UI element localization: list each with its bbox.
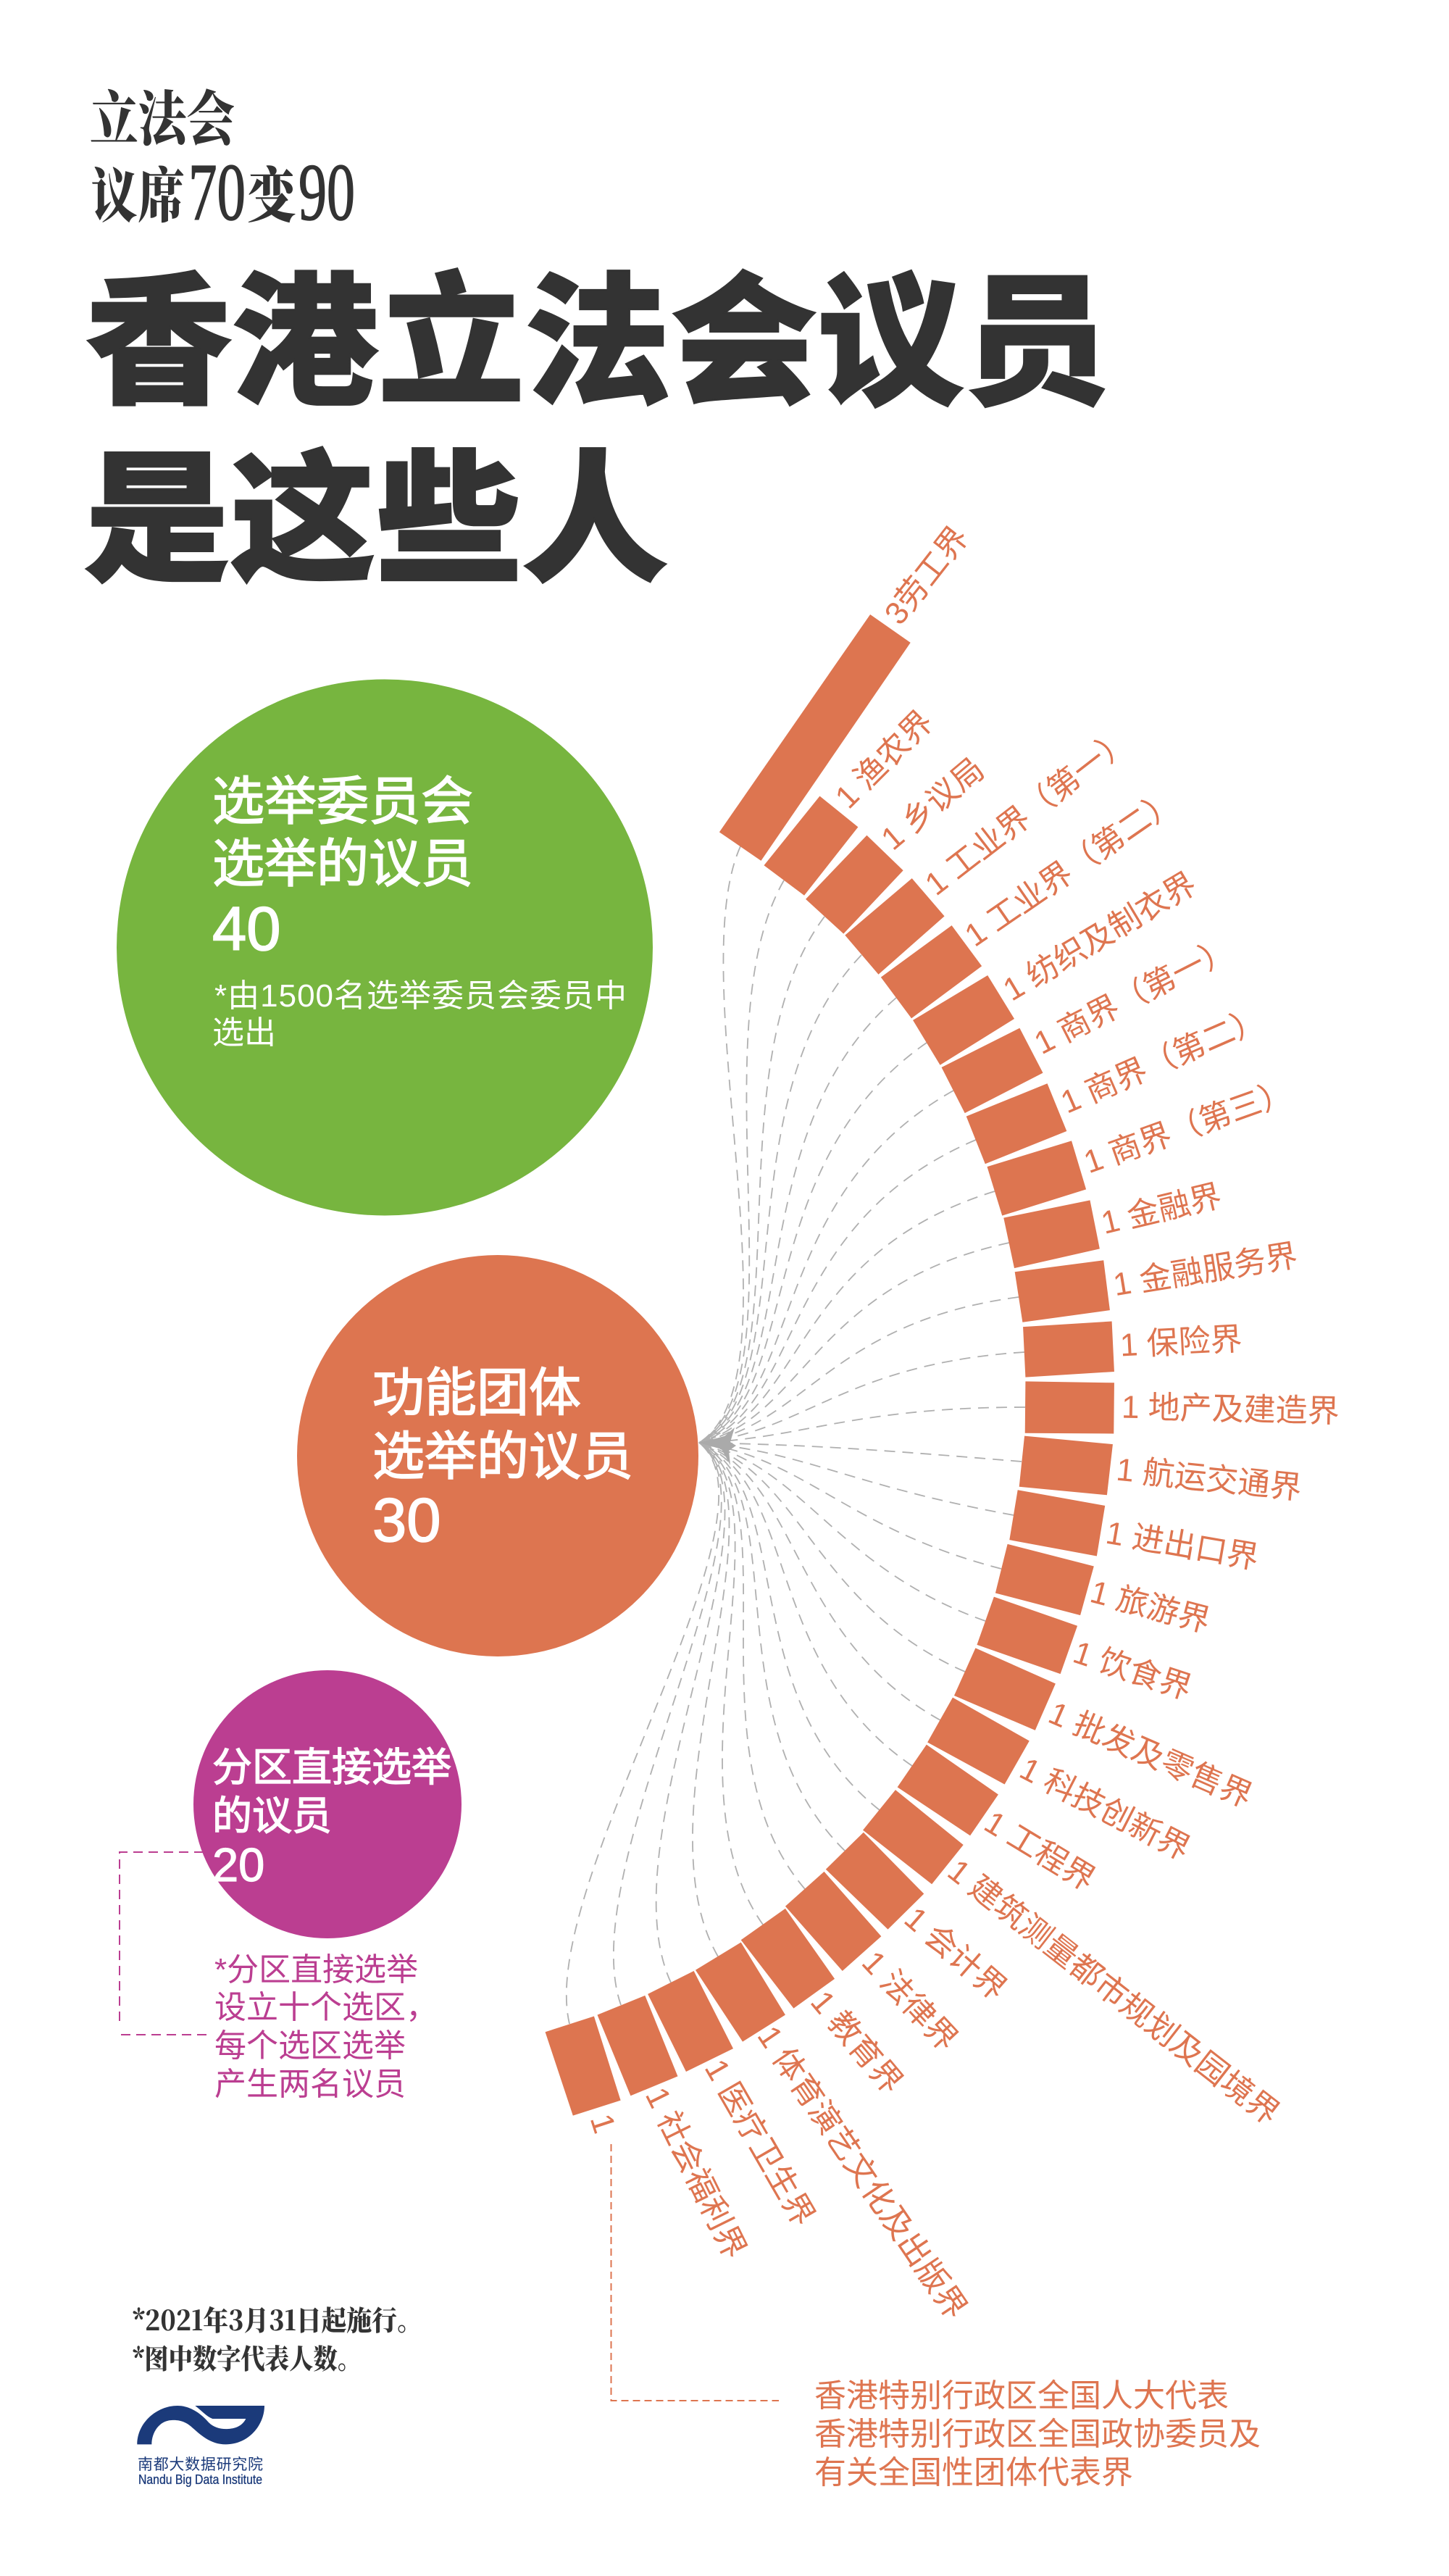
panel: functional constituencies circle xyxy=(297,1255,698,1656)
sector labels: 1 商界（第二） xyxy=(1056,1001,1269,1120)
sector labels: 1 商界（第一） xyxy=(1029,931,1239,1062)
note: geographical constituencies: *分区直接选举 xyxy=(214,1952,418,1988)
sector labels: 3劳工界 xyxy=(878,520,976,631)
panel: election committee circle: 选出 xyxy=(212,1015,276,1051)
sector labels: 1 进出口界 xyxy=(1103,1515,1261,1576)
subtitle: 变 xyxy=(247,149,298,234)
sector labels: 1 乡议局 xyxy=(874,751,991,857)
sector labels: 1 会计界 xyxy=(898,1901,1013,2007)
footnotes: *2021年3月31日起施行。 xyxy=(133,2298,422,2338)
subtitle: 70 xyxy=(188,148,246,238)
callout: national representatives: 香港特别行政区全国人大代表 xyxy=(814,2378,1229,2414)
sector labels: 1 工业界（第一） xyxy=(919,722,1138,902)
sector labels: 1 保险界 xyxy=(1119,1322,1243,1363)
dashed bracket: geographical note xyxy=(120,1852,206,2035)
panel: geographical constituencies circle xyxy=(193,1670,462,1938)
footnotes xyxy=(133,2298,422,2377)
sector labels: 1 旅游界 xyxy=(1087,1574,1214,1640)
sector labels: 1 商界（第三） xyxy=(1080,1074,1296,1180)
sector labels: 1 科技创新界 xyxy=(1014,1751,1196,1867)
connector tip xyxy=(699,1427,736,1465)
sector labels: 1 工程界 xyxy=(978,1804,1101,1898)
callout: national representatives xyxy=(814,2378,1261,2490)
sector labels: 1 航运交通界 xyxy=(1114,1452,1303,1506)
footnotes: *图中数字代表人数。 xyxy=(133,2337,362,2377)
subtitle: 90 xyxy=(298,148,355,238)
sector labels: 1 批发及零售界 xyxy=(1043,1696,1258,1814)
dashed connector: national representatives xyxy=(611,2144,779,2401)
panel: election committee circle: *由1500名选举委员会委员中 xyxy=(214,978,627,1014)
callout: national representatives: 香港特别行政区全国政协委员及 xyxy=(814,2417,1261,2452)
note: geographical constituencies xyxy=(214,1952,438,2102)
icon: institute logo xyxy=(137,2406,264,2444)
panel: election committee circle: 选举委员会 xyxy=(212,773,473,831)
sector labels: 1 金融服务界 xyxy=(1111,1238,1300,1303)
bars middle section xyxy=(863,1200,1114,1884)
panel: functional constituencies circle: 功能团体 xyxy=(372,1364,581,1422)
sector labels: 1 体育演艺文化及出版界 xyxy=(751,2019,974,2325)
callout: national representatives: 有关全国性团体代表界 xyxy=(814,2455,1133,2490)
panel: geographical constituencies circle: 分区直接选举 xyxy=(212,1745,451,1790)
sector labels: 1 法律界 xyxy=(855,1944,964,2058)
panel: geographical constituencies circle: 的议员 xyxy=(212,1793,332,1838)
sector labels: 1 饮食界 xyxy=(1069,1635,1196,1706)
subtitle xyxy=(90,72,355,238)
dashed connector curves xyxy=(567,846,1025,2024)
sector labels: 1 工业界（第二） xyxy=(959,783,1185,954)
sector labels: 1 医疗卫生界 xyxy=(698,2054,822,2233)
sector labels: 1 建筑测量都市规划及园境界 xyxy=(941,1853,1286,2132)
main title xyxy=(84,228,1110,611)
main title: 是这些人 xyxy=(84,406,668,611)
note: geographical constituencies: 产生两名议员 xyxy=(214,2067,406,2102)
sector labels: 1 社会福利界 xyxy=(638,2082,753,2264)
sector labels: 1 渔农界 xyxy=(829,704,940,815)
institute name xyxy=(138,2456,263,2487)
bars lower section xyxy=(546,1833,924,2116)
bar chart: sector seats xyxy=(546,614,1114,2116)
panel: election committee circle xyxy=(117,680,653,1216)
bars upper section xyxy=(719,614,1086,1216)
institute name: 南都大数据研究院 xyxy=(138,2456,263,2473)
note: geographical constituencies: 设立十个选区， xyxy=(214,1990,438,2025)
panel: election committee circle: 40 xyxy=(212,895,281,964)
note: geographical constituencies: 每个选区选举 xyxy=(214,2028,406,2064)
panel: functional constituencies circle: 选举的议员 xyxy=(372,1428,633,1486)
panel: geographical constituencies circle: 20 xyxy=(212,1838,264,1891)
subtitle: 议席 xyxy=(91,149,185,234)
panel: functional constituencies circle: 30 xyxy=(372,1486,441,1555)
institute name: Nandu Big Data Institute xyxy=(138,2472,262,2487)
main title: 香港立法会议员 xyxy=(85,228,1110,433)
sector labels: 1 教育界 xyxy=(803,1984,909,2101)
sector labels xyxy=(583,520,1340,2325)
sector labels: 1 金融界 xyxy=(1098,1178,1225,1241)
panel: election committee circle: 选举的议员 xyxy=(212,835,473,893)
sector labels: 1 纺织及制衣界 xyxy=(997,866,1203,1008)
sector labels: 1 xyxy=(583,2109,622,2138)
subtitle: 立法会 xyxy=(90,72,236,157)
sector labels: 1 地产及建造界 xyxy=(1121,1390,1340,1430)
